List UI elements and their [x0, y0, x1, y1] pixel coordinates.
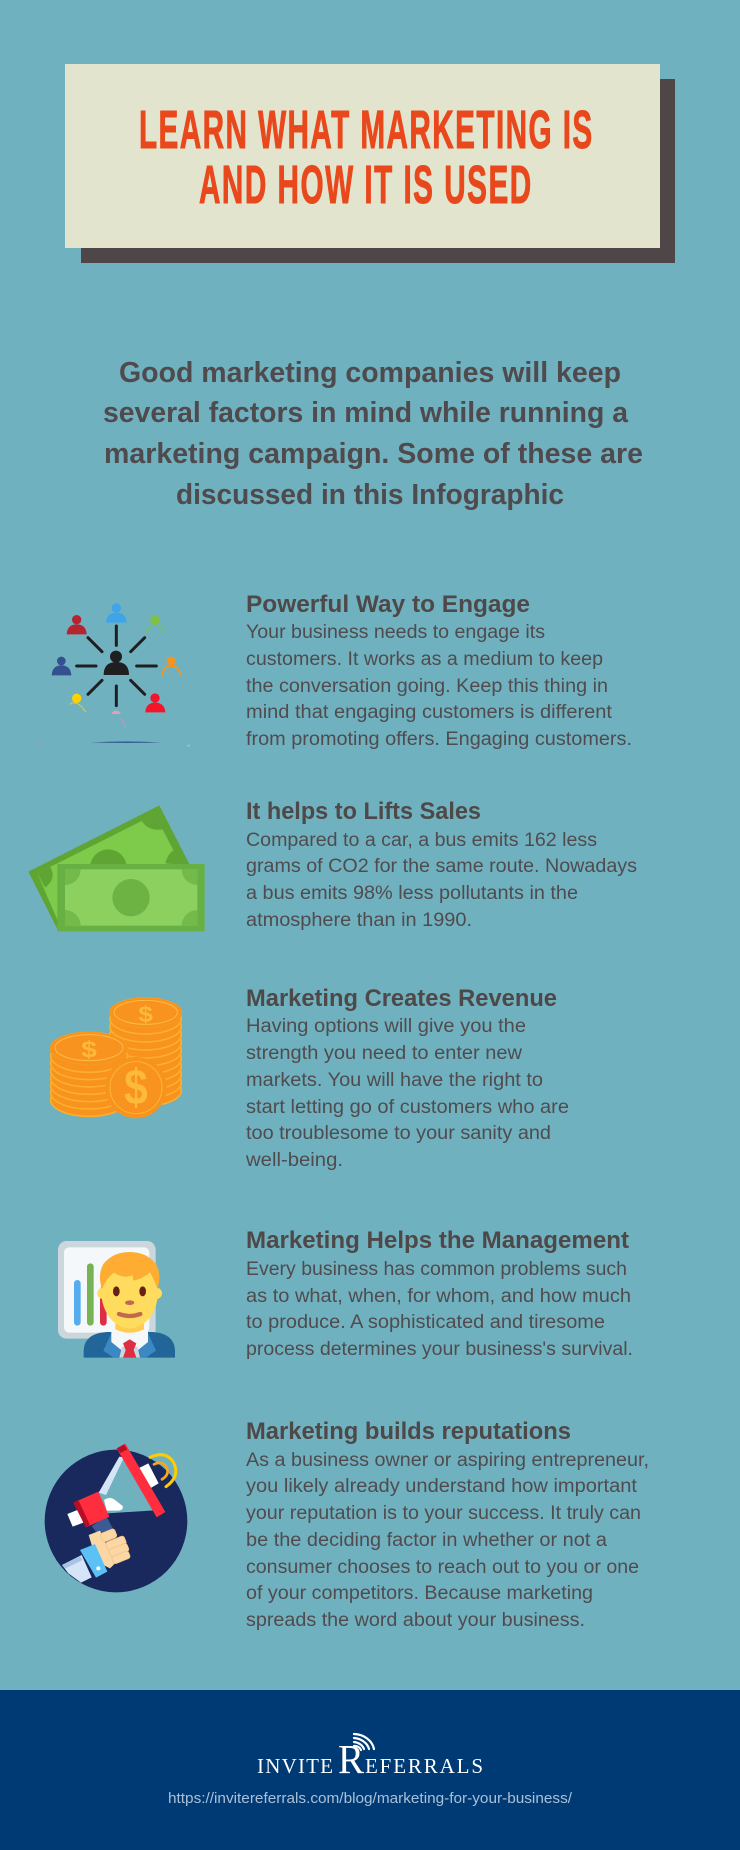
body text: grams of CO2 for the same route. Nowadays: [246, 856, 637, 877]
body text: the conversation going. Keep this thing in: [246, 676, 608, 697]
banner card: [65, 64, 660, 248]
right coin stack: [110, 998, 182, 1106]
logo: InviteReferrals: R: [338, 1736, 365, 1782]
heading: Marketing Helps the Management: [246, 1227, 629, 1254]
section: powerful way to engage: [246, 591, 632, 750]
back banknote: [28, 805, 191, 931]
body text: process determines your business's survival.: [246, 1339, 633, 1360]
heading: It helps to Lifts Sales: [246, 798, 481, 825]
icon: gold coin stacks: $: [138, 1003, 154, 1027]
man: [84, 1252, 175, 1358]
body text: strength you need to enter new: [246, 1043, 522, 1064]
url: https://invitereferrals.com/blog/marketing-for-your-business/: [168, 1790, 573, 1807]
icon: gold coin stacks: [50, 998, 182, 1118]
logo: InviteReferrals: INVITE: [257, 1754, 333, 1778]
title banner: [65, 64, 675, 263]
logo: InviteReferrals: EFERRALS: [365, 1754, 483, 1778]
heading: Marketing builds reputations: [246, 1418, 571, 1445]
intro paragraph: [103, 357, 643, 511]
icon: man with chart board: [58, 1241, 175, 1358]
front banknote: [57, 864, 205, 931]
intro paragraph: discussed in this Infographic: [176, 479, 564, 511]
icon: banknotes: [28, 805, 205, 931]
body text: markets. You will have the right to: [246, 1070, 543, 1091]
body text: [246, 622, 632, 750]
body text: a bus emits 98% less pollutants in the: [246, 883, 578, 904]
left coin stack: [50, 1032, 128, 1116]
icon: gold coin stacks: $: [81, 1037, 97, 1063]
body text: Your business needs to engage its: [246, 622, 545, 643]
body text: mind that engaging customers is different: [246, 702, 613, 723]
body text: you likely already understand how important: [246, 1476, 638, 1497]
body text: as to what, when, for whom, and how much: [246, 1286, 631, 1307]
body text: As a business owner or aspiring entrepreneur,: [246, 1450, 649, 1471]
sound waves: [150, 1455, 176, 1487]
navy circle: [45, 1450, 187, 1592]
section: helps the management: [246, 1227, 633, 1360]
title text: [139, 101, 592, 215]
body text: of your competitors. Because marketing: [246, 1583, 593, 1604]
intro paragraph: Good marketing companies will keep: [119, 357, 621, 389]
footer band: [0, 1690, 740, 1850]
hand and sleeve: [62, 1528, 131, 1583]
megaphone cone: [99, 1444, 165, 1517]
section: lifts sales: [246, 798, 637, 931]
body text: [246, 830, 637, 931]
body text: Having options will give you the: [246, 1016, 526, 1037]
body text: consumer chooses to reach out to you or one: [246, 1557, 639, 1578]
body text: [246, 1259, 633, 1360]
section: builds reputations: [246, 1418, 649, 1631]
icon: megaphone in hand: [45, 1444, 187, 1592]
title text: LEARN WHAT MARKETING IS: [139, 101, 592, 160]
body text: well-being.: [245, 1150, 343, 1171]
body text: too troublesome to your sanity and: [246, 1123, 551, 1144]
body text: your reputation is to your success. It truly can: [246, 1503, 641, 1524]
body text: atmosphere than in 1990.: [246, 910, 472, 931]
front coin: $: [124, 1059, 148, 1115]
body text: Compared to a car, a bus emits 162 less: [246, 830, 597, 851]
intro paragraph: several factors in mind while running a: [103, 397, 629, 429]
body text: from promoting offers. Engaging customers.: [246, 729, 632, 750]
body text: be the deciding factor in whether or not a: [246, 1530, 607, 1551]
icon: people network: [40, 603, 190, 748]
megaphone handle body: [67, 1492, 114, 1537]
banner shadow: [81, 79, 675, 263]
title text: AND HOW IT IS USED: [199, 156, 531, 215]
body text: customers. It works as a medium to keep: [246, 649, 603, 670]
section: creates revenue: [245, 985, 569, 1171]
body text: to produce. A sophisticated and tiresome: [246, 1312, 605, 1333]
body text: [245, 1016, 569, 1171]
heading: Powerful Way to Engage: [246, 591, 530, 618]
body text: spreads the word about your business.: [246, 1610, 585, 1631]
body text: start letting go of customers who are: [246, 1097, 569, 1118]
heading: Marketing Creates Revenue: [246, 985, 557, 1012]
chart board: [58, 1241, 156, 1339]
intro paragraph: marketing campaign. Some of these are: [104, 438, 643, 470]
logo: InviteReferrals: [257, 1734, 483, 1782]
body text: [246, 1450, 649, 1631]
body text: Every business has common problems such: [246, 1259, 627, 1280]
